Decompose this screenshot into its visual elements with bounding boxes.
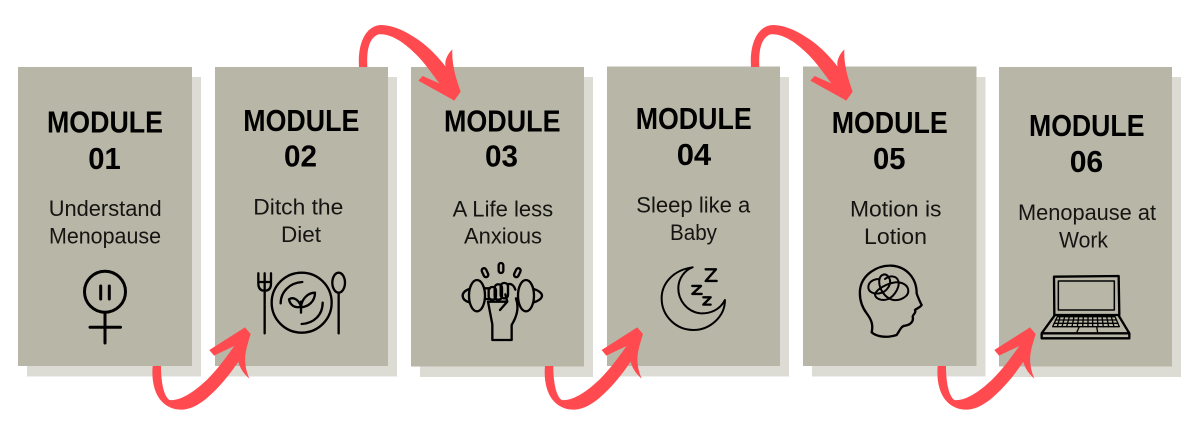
icon: crescent moon with z letters (662, 267, 725, 330)
heading: module 02 (243, 103, 359, 174)
text: ditch the diet: Diet (281, 222, 321, 247)
heading: module 03 (444, 104, 560, 174)
heading: module 03: 03 (485, 139, 518, 174)
text: motion is lotion (850, 197, 942, 249)
text: a life less anxious (453, 197, 553, 248)
heading: module 06: 06 (1070, 144, 1103, 179)
text: understand menopause (49, 196, 162, 248)
heading: module 06 (1029, 108, 1144, 179)
text: understand menopause: Understand (49, 196, 162, 221)
heading: module 05: MODULE (832, 105, 948, 140)
text: ditch the diet: Ditch the (253, 194, 343, 219)
heading: module 03: MODULE (444, 104, 560, 139)
heading: module 02: 02 (284, 139, 317, 174)
heading: module 01 (47, 105, 163, 176)
icon: venus symbol (84, 271, 126, 343)
icon: plate with fork and spoon (258, 273, 345, 333)
heading: module 05: 05 (873, 141, 906, 176)
text: sleep like a baby: Sleep like a (636, 193, 751, 218)
text: menopause at work: Menopause at (1018, 200, 1156, 225)
panel: module 01 (18, 67, 201, 376)
text: sleep like a baby: Baby (670, 220, 717, 245)
panel: module 06 (999, 67, 1181, 377)
text: motion is lotion: Lotion (864, 224, 927, 249)
text: a life less anxious: A Life less (453, 197, 553, 222)
panel: module 05 (803, 66, 986, 376)
heading: module 04 (636, 101, 752, 172)
text: menopause at work (1018, 200, 1156, 253)
arrow: module 03 to 04 (545, 327, 643, 410)
arrow: module 01 to 02 (152, 327, 251, 410)
heading: module 04: 04 (677, 137, 712, 172)
icon: fist holding dumbbell (463, 263, 542, 340)
arrow: module 02 to 03 (359, 25, 461, 101)
text: ditch the diet (253, 194, 343, 247)
panel: module 03 (411, 67, 593, 377)
text: sleep like a baby (636, 193, 751, 245)
text: menopause at work: Work (1059, 228, 1109, 253)
panel: module 02 (215, 67, 397, 376)
heading: module 01: 01 (88, 141, 121, 176)
heading: module 01: MODULE (47, 105, 163, 140)
heading: module 05 (832, 105, 948, 176)
arrow: module 04 to 05 (751, 25, 853, 101)
panel: module 04 (607, 66, 789, 376)
heading: module 06: MODULE (1029, 108, 1144, 143)
icon: laptop (1042, 276, 1129, 338)
icon: head with tangled thoughts (860, 266, 922, 337)
arrow: module 05 to 06 (937, 327, 1036, 410)
text: understand menopause: Menopause (49, 223, 161, 248)
text: a life less anxious: Anxious (464, 223, 542, 248)
heading: module 04: MODULE (636, 101, 752, 136)
heading: module 02: MODULE (243, 103, 359, 138)
text: motion is lotion: Motion is (850, 197, 942, 222)
